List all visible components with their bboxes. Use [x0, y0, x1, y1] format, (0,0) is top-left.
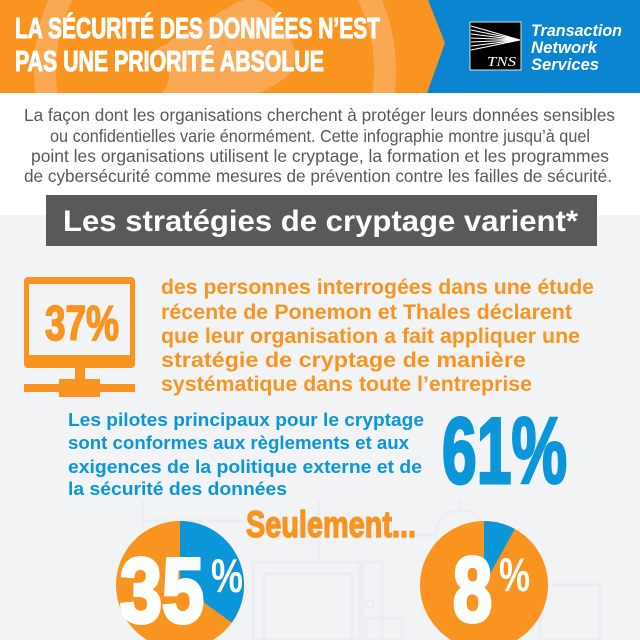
company name [531, 21, 622, 74]
header title [15, 11, 380, 78]
company name: Transaction [531, 21, 622, 40]
icon: monitor with 37% [24, 277, 135, 397]
header orange arrow panel [0, 0, 445, 93]
orange statement text [161, 276, 594, 396]
header title: PAS UNE PRIORITÉ ABSOLUE [15, 44, 324, 78]
company name: Services [531, 55, 599, 74]
header banner [0, 0, 640, 93]
company name: Network [531, 38, 599, 57]
orange statement text: des personnes interrogées dans une étude [161, 276, 594, 299]
orange statement text: récente de Ponemon et Thales déclarent [161, 301, 572, 324]
TNS logo [470, 22, 521, 70]
pie chart: 8% [420, 521, 548, 640]
pie chart: 8%: 8 [453, 539, 492, 640]
header title: LA SÉCURITÉ DES DONNÉES N’EST [15, 11, 380, 45]
blue statement text: la sécurité des données [68, 478, 287, 499]
intro text: ou confidentielles varie énormément. Cette infographie montre jusqu’à quel [50, 126, 590, 146]
blue statement text: exigences de la politique externe et de [68, 456, 422, 477]
orange statement text: systématique dans toute l’entreprise [161, 373, 532, 396]
pie chart: 35% [116, 521, 244, 640]
intro text: point les organisations utilisent le cryptage, la formation et les programmes [31, 146, 609, 166]
pie chart: 35%: % [211, 549, 243, 602]
pie chart: 8%: % [499, 548, 530, 601]
blue statement text: Les pilotes principaux pour le cryptage [68, 409, 424, 430]
orange statement text: que leur organisation a fait appliquer une [161, 325, 580, 348]
background: faint device line icons [143, 500, 600, 640]
orange statement text: stratégie de cryptage de manière [161, 349, 526, 372]
Seulement heading: Seulement... [246, 504, 416, 545]
header watermark [34, 0, 396, 93]
pie chart: 35%: 35 [120, 540, 204, 640]
intro text [24, 105, 615, 186]
blue statement text [68, 409, 424, 499]
icon: monitor with 37%: 37% [45, 297, 119, 351]
section heading banner: Les stratégies de cryptage varient* [63, 205, 578, 238]
intro text: La façon dont les organisations cherchent à protéger leurs données sensibles [24, 105, 615, 125]
TNS logo: TNS [487, 55, 516, 70]
intro text: de cybersécurité comme mesures de prévention contre les failles de sécurité. [24, 166, 612, 186]
61% statistic: 61% [442, 398, 567, 503]
section heading banner [46, 195, 597, 246]
blue statement text: sont conformes aux règlements et aux [68, 432, 410, 453]
